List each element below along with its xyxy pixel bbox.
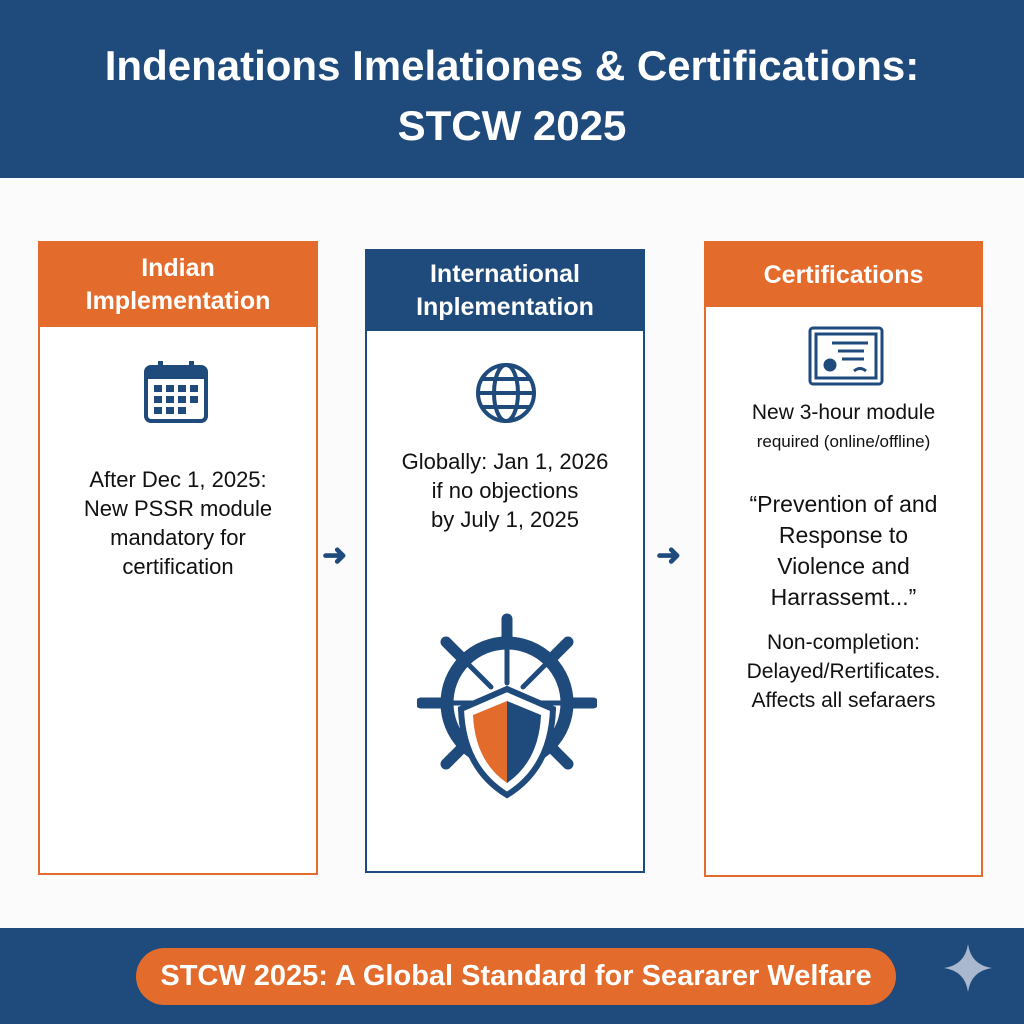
panel: Indian implementation: [38, 241, 318, 875]
text block: required (online/offline): [757, 432, 930, 451]
quote: Harrassemt...”: [771, 584, 916, 610]
icon: ship wheel with shield: [417, 614, 597, 798]
text block: [84, 467, 272, 579]
text block: Delayed/Rertificates.: [747, 660, 940, 683]
text block: Non-completion:: [767, 631, 920, 654]
icon: calendar: [144, 361, 208, 423]
title: [0, 0, 1024, 178]
panel: International implementation: [365, 249, 645, 873]
quote: “Prevention of and: [750, 491, 937, 517]
panel: Certifications: [704, 241, 983, 877]
panel heading: [367, 251, 643, 331]
text block: Affects all sefaraers: [751, 689, 936, 712]
panel heading: Certifications: [764, 260, 923, 288]
text block: After Dec 1, 2025:: [89, 467, 267, 492]
footer pill: STCW 2025: A Global Standard for Seararer Welfare: [160, 960, 872, 992]
text block: if no objections: [432, 478, 578, 503]
text block: [752, 401, 935, 451]
text block: certification: [122, 554, 234, 579]
panel heading: [706, 243, 981, 307]
text block: New 3-hour module: [752, 401, 935, 424]
panel heading: [40, 243, 316, 327]
arrow: ➜: [656, 539, 681, 572]
footer band: [0, 928, 1024, 1024]
panel heading: Inplementation: [416, 293, 594, 321]
title: Indenations Imelationes & Certifications:: [105, 42, 919, 89]
footer pill: [136, 948, 896, 1005]
icon: certificate: [808, 326, 884, 386]
quote: Response to: [779, 522, 908, 548]
title: STCW 2025: [398, 102, 626, 149]
quote: Violence and: [777, 553, 910, 579]
panel heading: Indian: [141, 254, 215, 282]
icon: globe: [476, 363, 536, 423]
text block: by July 1, 2025: [431, 507, 579, 532]
text block: mandatory for: [110, 525, 246, 550]
arrow: ➜: [322, 539, 347, 572]
quote: [750, 491, 937, 610]
icon: sparkle: [944, 944, 992, 992]
text block: [747, 631, 940, 712]
panel heading: International: [430, 260, 580, 288]
text block: New PSSR module: [84, 496, 272, 521]
panel heading: Implementation: [86, 287, 270, 315]
text block: Globally: Jan 1, 2026: [402, 449, 608, 474]
text block: [402, 449, 608, 532]
